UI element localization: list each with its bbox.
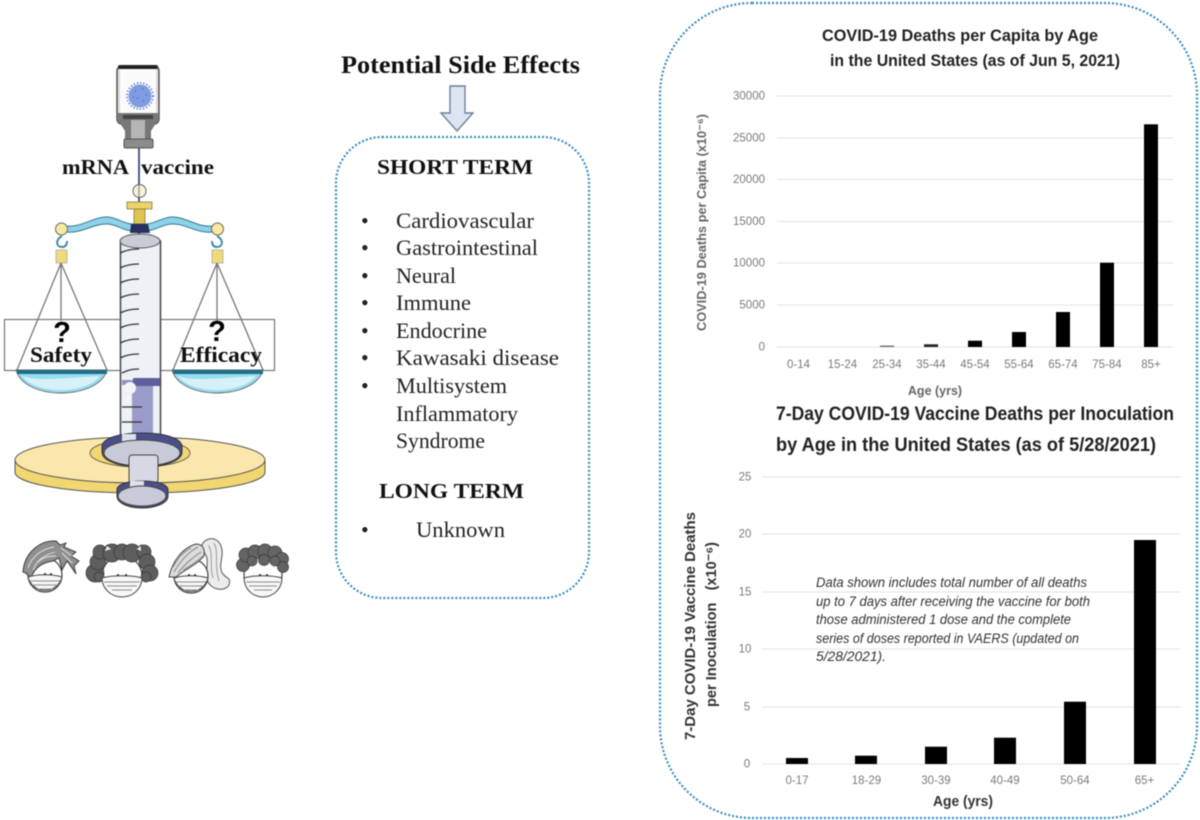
list: short term effects: • <box>361 290 369 315</box>
bar chart: deaths per capita by age: 5000 <box>739 300 765 312</box>
bar chart: deaths per capita by age: 55-64 <box>1004 359 1034 371</box>
bar chart: deaths per capita by age: 30000 <box>733 90 765 102</box>
chart note <box>816 575 1090 664</box>
list: short term effects: Inflammatory <box>396 401 518 426</box>
heading: short term: SHORT TERM <box>377 155 533 179</box>
bar chart: deaths per capita by age: 65-74 <box>1048 359 1078 371</box>
icon: balance beam <box>56 184 224 263</box>
person 4 <box>236 544 288 597</box>
chart note: up to 7 days after receiving the vaccine for both <box>816 594 1090 609</box>
bar chart: vaccine deaths by age: 15 <box>739 586 751 598</box>
list: short term effects: Endocrine <box>396 318 487 343</box>
bar chart: vaccine deaths by age: 40-49 <box>990 775 1020 787</box>
list: short term effects: Cardiovascular <box>396 208 535 233</box>
chart title: vaccine deaths per inoculation <box>776 404 1174 456</box>
person 1 <box>23 541 79 592</box>
bar chart: deaths per capita by age: 75-84 <box>1092 359 1122 371</box>
icon: syringe <box>102 234 182 508</box>
icon: needle <box>138 148 140 236</box>
list: short term effects: • <box>361 318 369 343</box>
bar chart: deaths per capita by age: 15-24 <box>828 359 858 371</box>
bar chart: deaths per capita by age: 25000 <box>733 132 765 144</box>
left scale pan <box>16 263 107 393</box>
bar chart: vaccine deaths by age: 65+ <box>1135 775 1155 787</box>
chart note: those administered 1 dose and the complete <box>816 612 1071 627</box>
panel: mortality charts <box>660 3 1197 818</box>
chart note: series of doses reported in VAERS (updated on <box>816 631 1079 646</box>
bar chart: deaths per capita by age: 0 <box>759 342 765 354</box>
list: long term effects <box>361 517 505 542</box>
label: safety: ? <box>53 317 71 349</box>
list: short term effects: Immune <box>396 290 471 315</box>
bar chart: vaccine deaths by age: per Inoculation (x10⁻⁶) <box>703 542 720 707</box>
person 2 <box>86 544 158 597</box>
bar chart: deaths per capita by age: 20000 <box>733 174 765 186</box>
label: safety: Safety <box>30 342 92 367</box>
bar chart: vaccine deaths by age: 30-39 <box>921 775 951 787</box>
heading: long term: LONG TERM <box>379 479 524 503</box>
list: short term effects: • <box>361 235 369 260</box>
bar chart: deaths per capita by age: Age (yrs) <box>908 384 962 398</box>
icon: vaccine vial <box>117 65 159 148</box>
list: short term effects: • <box>361 373 369 398</box>
label: mRNA vaccine: vaccine <box>141 155 214 179</box>
list: long term effects: Unknown <box>416 517 505 542</box>
bar chart: deaths per capita by age: 10000 <box>733 258 765 270</box>
bar chart: vaccine deaths by age: Age (yrs) <box>933 793 993 810</box>
safety and efficacy box <box>4 320 274 370</box>
label: efficacy: Efficacy <box>180 342 262 367</box>
chart title: vaccine deaths per inoculation: by Age in the United States (as of 5/28/2021) <box>776 435 1156 456</box>
bar chart: deaths per capita by age: 35-44 <box>916 359 946 371</box>
right scale pan <box>172 263 263 393</box>
bar chart: vaccine deaths by age <box>682 472 1180 810</box>
list: short term effects: • <box>361 345 369 370</box>
label: mRNA vaccine: mRNA <box>62 155 130 179</box>
bar chart: deaths per capita by age: COVID-19 Deaths per Capita (x10⁻⁶) <box>695 114 709 331</box>
list: short term effects: Neural <box>396 263 456 288</box>
people in masks <box>23 539 288 597</box>
bar chart: vaccine deaths by age: 10 <box>739 644 751 656</box>
chart note: 5/28/2021). <box>816 649 886 664</box>
label: mRNA vaccine <box>62 155 214 179</box>
chart title: vaccine deaths per inoculation: 7-Day COVID-19 Vaccine Deaths per Inoculation <box>776 404 1174 425</box>
panel: side effects <box>336 137 589 598</box>
bar chart: vaccine deaths by age: 18-29 <box>852 775 881 787</box>
chart title: deaths per capita: COVID-19 Deaths per Capita by Age <box>822 27 1098 45</box>
bar chart: vaccine deaths by age: 5 <box>744 702 750 714</box>
list: short term effects: • <box>361 263 369 288</box>
bar chart: vaccine deaths by age: 25 <box>739 472 751 484</box>
bar chart: vaccine deaths by age: 20 <box>739 528 751 540</box>
bar chart: deaths per capita by age: 15000 <box>733 216 765 228</box>
bar chart: deaths per capita by age: 45-54 <box>960 359 990 371</box>
bar chart: vaccine deaths by age: 0 <box>744 758 750 770</box>
list: short term effects: Multisystem <box>396 373 507 398</box>
bar chart: deaths per capita by age: 85+ <box>1141 359 1161 371</box>
person 3 <box>169 539 230 593</box>
list: short term effects: Syndrome <box>396 428 485 453</box>
label: efficacy <box>180 316 262 367</box>
label: safety <box>30 317 92 367</box>
bar chart: deaths per capita by age: 25-34 <box>872 359 902 371</box>
list: short term effects: Gastrointestinal <box>396 235 538 260</box>
bar chart: vaccine deaths by age: 7-Day COVID-19 Vaccine Deaths <box>682 512 699 740</box>
heading: potential side effects: Potential Side Effects <box>341 52 580 79</box>
illustration: vaccine balance scale <box>4 65 274 508</box>
chart title: deaths per capita: in the United States (as of Jun 5, 2021) <box>830 52 1120 70</box>
chart title: deaths per capita <box>822 27 1120 70</box>
list: short term effects: Kawasaki disease <box>396 345 559 370</box>
bar chart: vaccine deaths by age: 0-17 <box>785 775 809 787</box>
chart note: Data shown includes total number of all deaths <box>816 575 1087 590</box>
label: efficacy: ? <box>208 316 226 348</box>
list: long term effects: • <box>361 517 369 542</box>
arrow: down to side effects <box>441 86 473 131</box>
bar chart: vaccine deaths by age: 50-64 <box>1060 775 1090 787</box>
bar chart: deaths per capita by age: 0-14 <box>787 359 811 371</box>
list: short term effects: • <box>361 208 369 233</box>
bar chart: deaths per capita by age <box>695 90 1173 398</box>
icon: base plate <box>15 437 265 493</box>
list: short term effects <box>361 208 559 453</box>
